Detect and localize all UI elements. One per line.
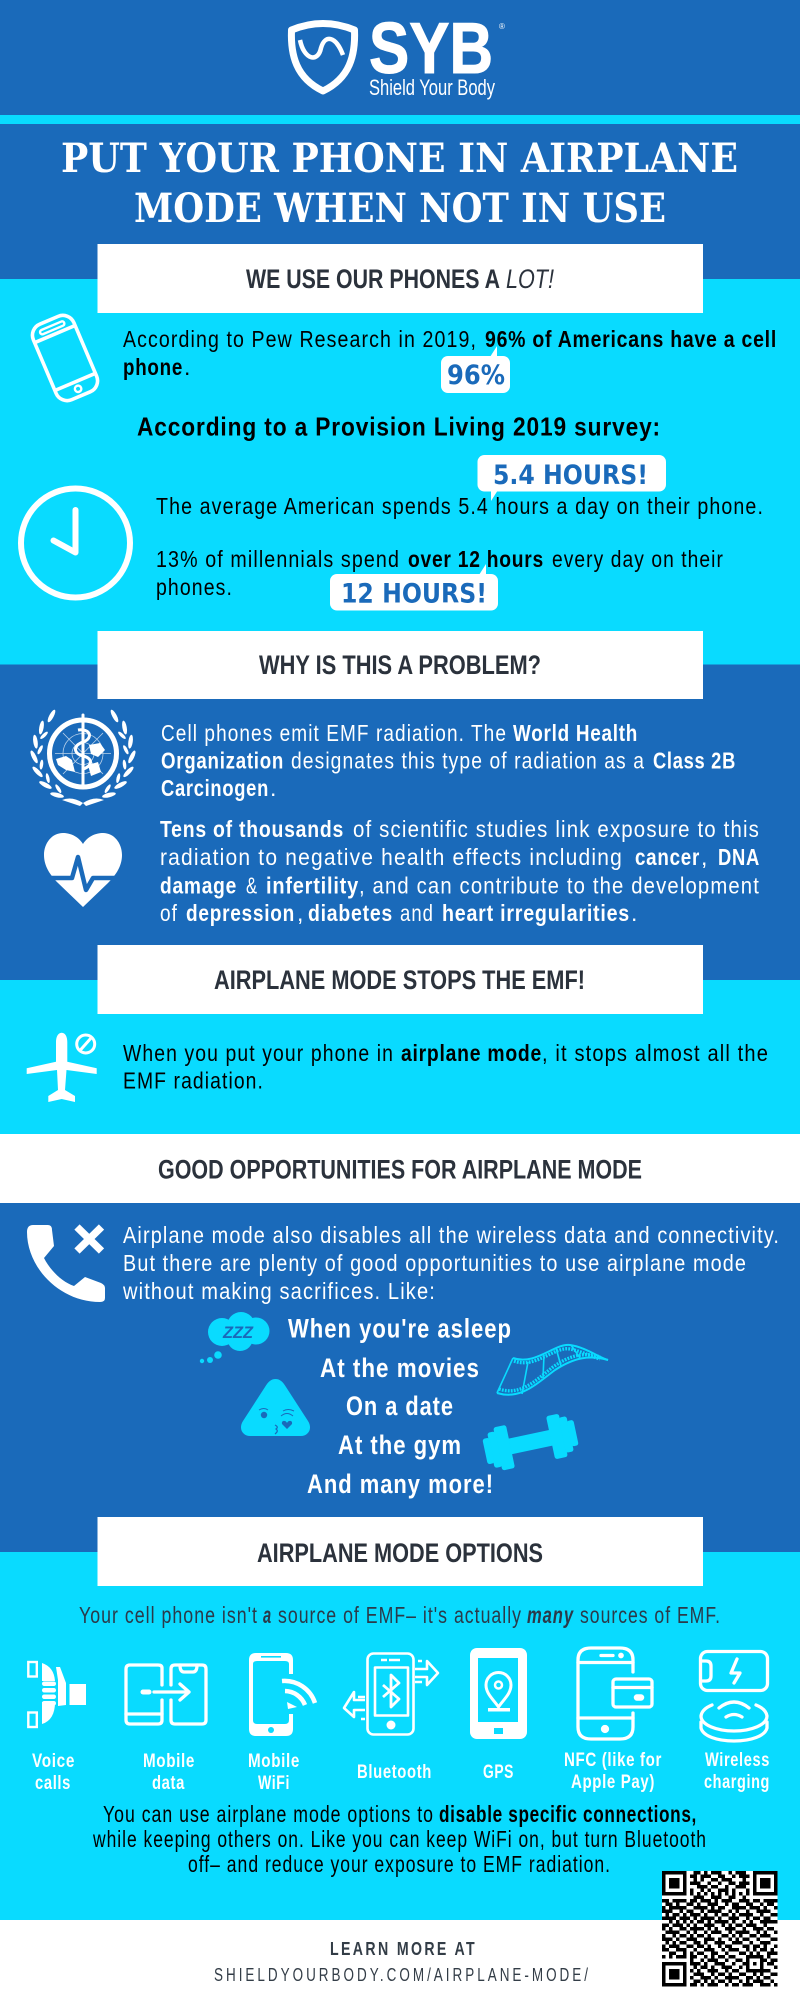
text: scientific studies: ,: [297, 900, 305, 926]
text: scientific studies: cancer: [635, 844, 700, 870]
heading: we use our phones a lot: LOT!: [506, 264, 554, 294]
text: WHO classification: Cell phones emit EMF radiation. The: [161, 720, 507, 746]
text: scientific studies: .: [631, 900, 639, 926]
icon: heart with pulse: [40, 833, 126, 907]
text: scientific studies: infertility: [266, 872, 359, 898]
logo: Shield Your Body: Shield Your Body: [369, 75, 495, 100]
text: WHO classification: Class 2B: [653, 748, 736, 774]
heading: we use our phones a lot: WE USE OUR PHONES A: [246, 264, 500, 294]
text: survey statistics: 13% of millennials spend: [156, 546, 400, 572]
heading: why is this a problem: [98, 631, 703, 699]
text: scientific studies: diabetes: [308, 900, 393, 926]
callout: 5.4 hours: [478, 455, 666, 501]
footer: learn more: [214, 1939, 591, 1985]
callout: 96%: 96%: [447, 360, 505, 391]
text: airplane mode stops radiation: , it stops almost all the: [542, 1040, 769, 1066]
labels: airplane mode options: GPS: [483, 1762, 514, 1783]
icon: smartphone: [29, 312, 101, 404]
title: [61, 135, 738, 232]
text: scientific studies: DNA: [718, 844, 760, 870]
callout: 5.4 hours: 5.4 HOURS!: [493, 460, 648, 491]
text: airplane mode stops radiation: When you put your phone in: [123, 1040, 394, 1066]
text: WHO classification: World Health: [513, 720, 638, 746]
text: airplane mode disables data: without making sacrifices. Like:: [122, 1278, 436, 1304]
text: WHO classification: [161, 720, 736, 801]
title: MODE WHEN NOT IN USE: [134, 185, 666, 232]
heading: why is this a problem: WHY IS THIS A PROBLEM?: [259, 650, 541, 680]
text: scientific studies: of: [160, 900, 178, 926]
QR code: [662, 1871, 778, 1986]
icon: World Health Organization emblem: [29, 709, 137, 806]
callout: 96%: [441, 346, 510, 393]
text: WHO classification: .: [270, 775, 278, 801]
text: scientific studies: &: [246, 872, 258, 898]
icon: mobile data: [126, 1665, 206, 1724]
heading: good opportunities: GOOD OPPORTUNITIES FOR AIRPLANE MODE: [158, 1154, 642, 1184]
icon: sleep cloud: [200, 1312, 270, 1363]
text: Pew Research statistic: [123, 326, 777, 380]
icon: wireless charging: [700, 1652, 768, 1741]
text: airplane mode disables data: [122, 1222, 780, 1304]
text: disable specific connections: You can use airplane mode options to: [103, 1801, 434, 1827]
title: PUT YOUR PHONE IN AIRPLANE: [61, 135, 738, 182]
icon: NFC payment: [578, 1648, 652, 1739]
text: scientific studies: and: [400, 900, 434, 926]
heading: airplane mode options: AIRPLANE MODE OPTIONS: [257, 1538, 543, 1568]
text: Pew Research statistic: phone: [123, 354, 183, 380]
text: airplane mode stops radiation: [123, 1040, 769, 1094]
logo: Shield Your Body: SYB: [369, 9, 493, 89]
callout: 12 hours: 12 HOURS!: [341, 578, 487, 610]
text: WHO classification: Carcinogen: [161, 775, 269, 801]
logo: Shield Your Body: [291, 9, 505, 100]
text: Pew Research statistic: .: [184, 354, 192, 380]
icon: kissing face: [241, 1379, 310, 1436]
icon: film strip: [497, 1345, 608, 1395]
subheading: Provision Living survey: According to a Provision Living 2019 survey:: [137, 412, 661, 442]
text: scientific studies: Tens of thousands: [160, 816, 344, 842]
list: opportunities: On a date: [346, 1391, 454, 1421]
text: disable specific connections: [92, 1801, 707, 1877]
icon: GPS: [470, 1648, 527, 1739]
text: many sources of EMF: sources of EMF.: [580, 1602, 721, 1628]
text: scientific studies: radiation to negative health effects including: [160, 844, 623, 870]
list: opportunities: At the movies: [320, 1353, 480, 1383]
labels: airplane mode options: NFC (like for: [564, 1750, 662, 1771]
text: scientific studies: ,: [701, 844, 709, 870]
labels: airplane mode options: calls: [35, 1773, 71, 1794]
labels: airplane mode options: Mobile: [248, 1751, 300, 1772]
text: survey statistics: [156, 493, 764, 600]
footer: learn more: SHIELDYOURBODY.COM/AIRPLANE-MODE/: [214, 1965, 591, 1985]
text: scientific studies: of scientific studies link exposure to this: [353, 816, 760, 842]
heading: airplane mode stops the EMF: [98, 945, 703, 1014]
labels: airplane mode options: Voice: [32, 1751, 75, 1772]
text: scientific studies: heart irregularities: [442, 900, 630, 926]
icon: mobile wifi: [249, 1653, 315, 1736]
text: disable specific connections: off– and reduce your exposure to EMF radiation.: [188, 1851, 611, 1877]
icon: voice calls: [28, 1662, 86, 1727]
labels: airplane mode options: Bluetooth: [357, 1762, 432, 1783]
footer: learn more: LEARN MORE AT: [330, 1939, 477, 1959]
text: WHO classification: Organization: [161, 748, 284, 774]
text: airplane mode stops radiation: EMF radiation.: [123, 1068, 264, 1094]
text: survey statistics: phones.: [156, 574, 233, 600]
heading: airplane mode options: [98, 1517, 703, 1586]
text: many sources of EMF: source of EMF– it's actually: [278, 1602, 522, 1628]
heading: airplane mode stops the EMF: AIRPLANE MODE STOPS THE EMF!: [214, 965, 585, 995]
icon: sleep cloud: ZZZ: [222, 1323, 254, 1342]
text: scientific studies: depression: [186, 900, 295, 926]
list: opportunities: And many more!: [307, 1469, 494, 1499]
labels: airplane mode options: Wireless: [705, 1750, 770, 1771]
text: many sources of EMF: many: [527, 1602, 574, 1628]
text: survey statistics: every day on their: [552, 546, 724, 572]
icon: airplane with no symbol: [27, 1033, 97, 1102]
callout: 12 hours: [330, 564, 498, 610]
text: survey statistics: over 12 hours: [408, 546, 544, 572]
text: many sources of EMF: [79, 1602, 721, 1628]
text: Pew Research statistic: According to Pew Research in 2019,: [123, 326, 477, 352]
list: opportunities: [288, 1314, 512, 1499]
icon: phone with X: [27, 1225, 105, 1302]
list: opportunities: When you're asleep: [288, 1314, 512, 1344]
labels: airplane mode options: Mobile: [143, 1751, 195, 1772]
labels: airplane mode options: [32, 1750, 770, 1794]
heading: we use our phones a lot: [98, 244, 703, 313]
icon: clock: [21, 488, 130, 598]
labels: airplane mode options: data: [152, 1773, 185, 1794]
text: WHO classification: designates this type of radiation as a: [291, 748, 645, 774]
text: scientific studies: [160, 816, 760, 926]
text: airplane mode stops radiation: airplane mode: [401, 1040, 542, 1066]
labels: airplane mode options: Apple Pay): [571, 1772, 655, 1793]
logo: Shield Your Body: ®: [499, 22, 505, 31]
list: opportunities: At the gym: [338, 1430, 462, 1460]
text: many sources of EMF: a: [263, 1602, 272, 1628]
text: scientific studies: damage: [160, 872, 237, 898]
labels: airplane mode options: WiFi: [258, 1773, 290, 1794]
text: many sources of EMF: Your cell phone isn't: [79, 1602, 258, 1628]
icon: dumbbell: [480, 1411, 581, 1473]
text: disable specific connections: disable specific connections,: [439, 1801, 697, 1827]
labels: airplane mode options: charging: [704, 1772, 770, 1793]
icon: bluetooth: [344, 1654, 438, 1734]
